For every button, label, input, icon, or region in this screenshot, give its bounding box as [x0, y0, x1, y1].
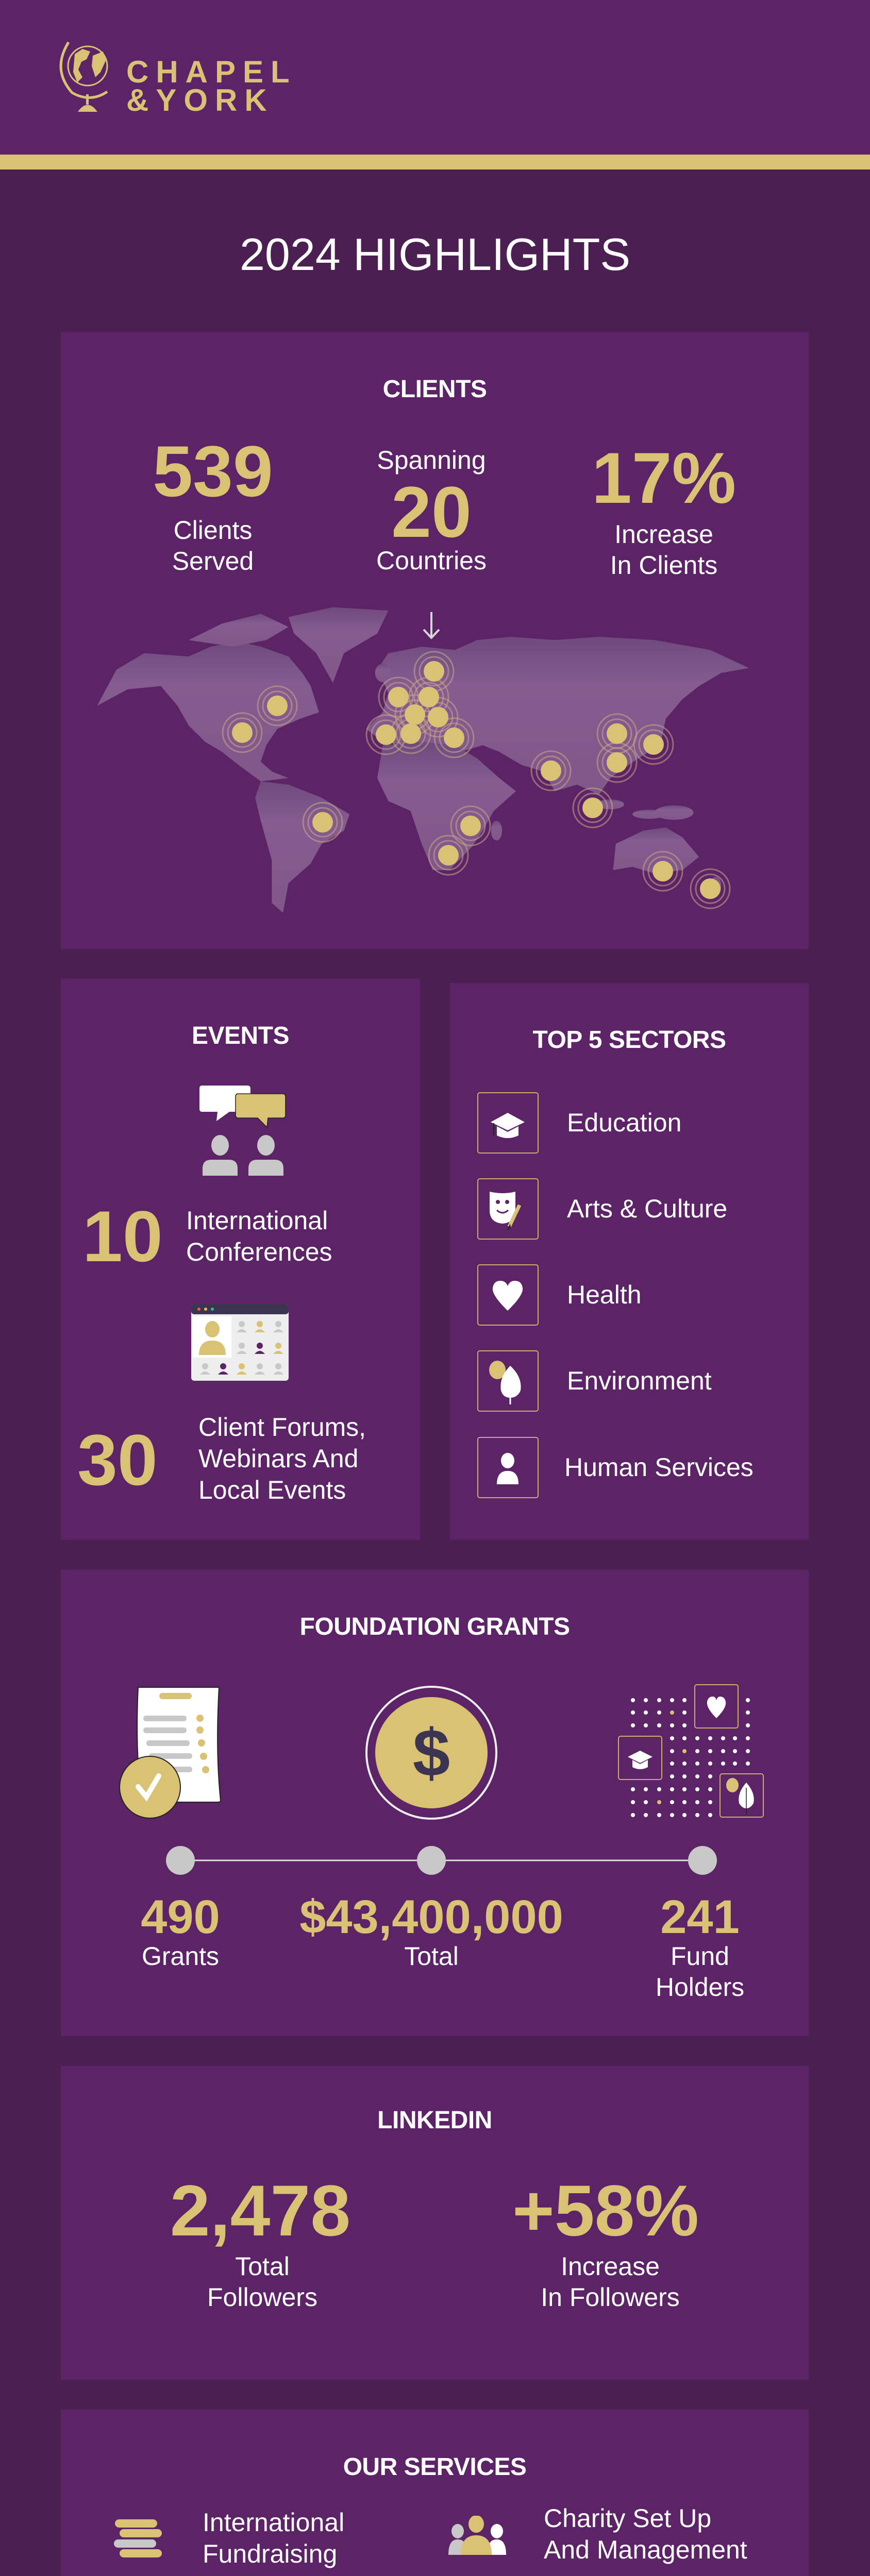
logo text — [126, 55, 297, 117]
sector: arts & culture: Arts & Culture — [567, 1194, 727, 1223]
stat: 539 clients served: 539 — [153, 431, 273, 512]
sector: human services: Human Services — [564, 1453, 754, 1482]
arrow — [424, 612, 439, 638]
heading: clients: CLIENTS — [383, 376, 487, 403]
stat: 30 events: Local Events — [198, 1476, 346, 1504]
stat: total followers — [170, 2170, 350, 2312]
header bar — [0, 0, 870, 155]
stat: increase in followers: In Followers — [541, 2283, 680, 2312]
stat: spanning 20 countries: 20 — [391, 471, 472, 552]
sector: health — [477, 1264, 642, 1326]
logo text: CHAPEL — [126, 55, 297, 89]
sector: education — [477, 1092, 681, 1154]
sector: education: Education — [567, 1108, 681, 1137]
stat: 241 fund holders: 241 — [660, 1891, 740, 1943]
panel: top 5 sectors — [450, 983, 809, 1540]
icon: dollar coin — [365, 1686, 497, 1820]
gold band — [0, 155, 870, 170]
heading: events: EVENTS — [192, 1022, 289, 1049]
title: 2024 HIGHLIGHTS — [240, 229, 630, 280]
stat: increase in followers: +58% — [512, 2170, 699, 2251]
panel: events — [61, 978, 420, 1540]
icon: dollar coin: $ — [413, 1715, 450, 1790]
sector: health: Health — [567, 1280, 642, 1309]
panel: linkedin — [61, 2066, 809, 2380]
stat: 490 grants — [141, 1891, 220, 1971]
stat: 17% increase — [592, 437, 736, 580]
stat: 241 fund holders: Holders — [656, 1973, 744, 2002]
stat: total followers: Followers — [207, 2283, 317, 2312]
heading: linkedin: LINKEDIN — [377, 2107, 492, 2134]
stat: spanning 20 countries — [376, 446, 487, 575]
stat: 30 events: Client Forums, — [198, 1413, 366, 1442]
service: charity set up: And Management — [544, 2535, 747, 2564]
stat: 490 grants: 490 — [141, 1891, 220, 1943]
stat: 10 conferences: International — [186, 1206, 328, 1235]
stat: 10 conferences — [82, 1196, 332, 1277]
stat: total: Total — [404, 1942, 459, 1971]
stat: total followers: Total — [235, 2252, 290, 2281]
stat: 17% increase: Increase — [614, 520, 713, 549]
heading: foundation grants: FOUNDATION GRANTS — [300, 1613, 570, 1640]
sector: arts & culture — [477, 1178, 727, 1240]
stat: 17% increase: In Clients — [610, 551, 717, 580]
icon: webinar grid — [191, 1304, 289, 1381]
stat: total followers: 2,478 — [170, 2170, 350, 2251]
stat: increase in followers — [512, 2170, 699, 2312]
stat: 10 conferences: Conferences — [186, 1238, 332, 1266]
world map with client pins — [97, 607, 749, 913]
stat: 539 clients served: Served — [172, 547, 254, 575]
heading: top 5 sectors: TOP 5 SECTORS — [533, 1026, 726, 1054]
stat: 241 fund holders — [656, 1891, 744, 2002]
stat: 490 grants: Grants — [142, 1942, 219, 1971]
service: charity set up: Charity Set Up — [544, 2504, 711, 2533]
stat: 30 events: Webinars And — [198, 1444, 358, 1473]
stat: total: $43,400,000 — [299, 1891, 563, 1943]
stat: 539 clients served: Clients — [174, 516, 252, 545]
stat: 10 conferences: 10 — [82, 1196, 163, 1277]
icon: globe logo — [60, 41, 108, 112]
stat: spanning 20 countries: Spanning — [377, 446, 486, 474]
panel: our services — [61, 2410, 809, 2576]
logo text: &YORK — [126, 83, 274, 117]
service: international fundraising — [114, 2508, 344, 2568]
stat: 539 clients served — [153, 431, 273, 575]
stat: increase in followers: Increase — [561, 2252, 660, 2281]
sector: human services — [477, 1437, 754, 1498]
timeline — [166, 1846, 717, 1875]
panel: foundation grants — [61, 1570, 809, 2036]
stat: 241 fund holders: Fund — [671, 1942, 729, 1971]
heading: our services: OUR SERVICES — [343, 2453, 526, 2481]
service: international fundraising: Fundraising — [203, 2539, 337, 2568]
stat: 17% increase: 17% — [592, 437, 736, 518]
sector: environment: Environment — [567, 1366, 712, 1395]
stat: 30 events: 30 — [77, 1419, 158, 1500]
icon: grant receipt — [119, 1687, 221, 1819]
panel: clients — [61, 332, 809, 949]
stat: total — [299, 1891, 563, 1971]
logo — [60, 41, 297, 117]
service: international fundraising: International — [203, 2508, 344, 2537]
service: charity set up — [448, 2504, 747, 2564]
stat: 30 events — [77, 1413, 366, 1504]
icon: fund holders grid — [618, 1684, 764, 1818]
sector: environment — [477, 1350, 712, 1412]
icon: conference chat — [199, 1086, 286, 1176]
stat: spanning 20 countries: Countries — [376, 546, 487, 575]
